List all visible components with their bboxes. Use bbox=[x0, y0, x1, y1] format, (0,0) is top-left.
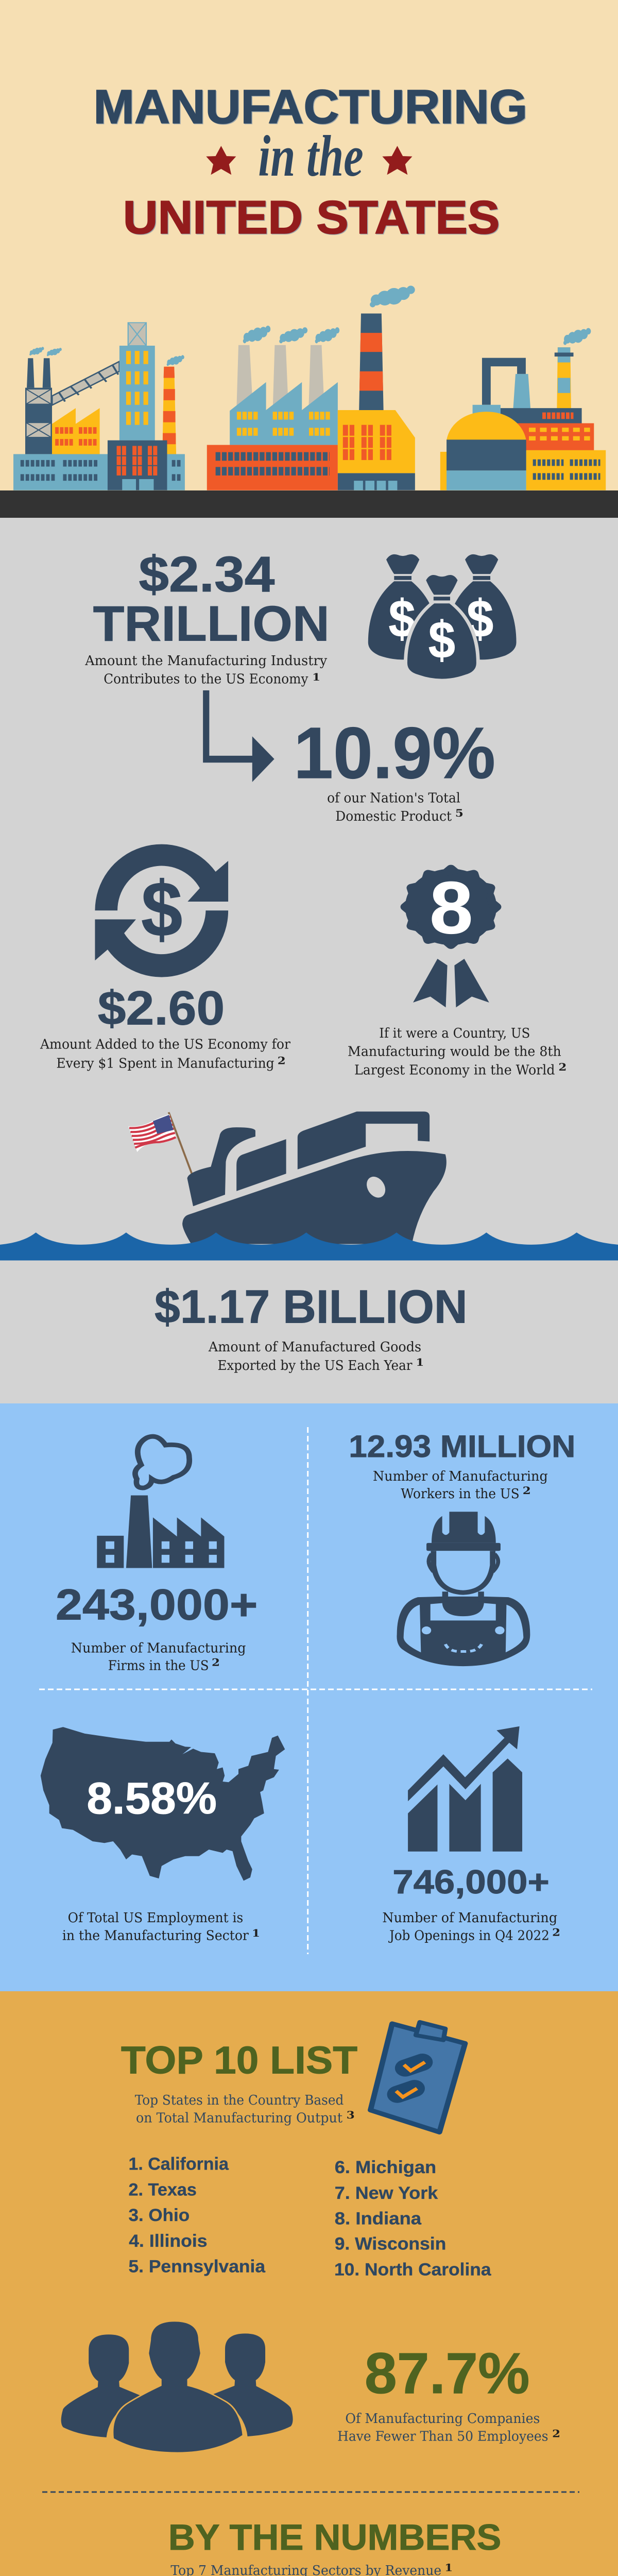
icon: circular dollar arrows bbox=[95, 844, 228, 977]
stat: 12.93 million workers: 12.93 MILLION bbox=[349, 1429, 575, 1464]
title line: United States: UNITED STATES bbox=[123, 191, 500, 244]
stat: $2.34 trillion: $2.34 bbox=[139, 546, 274, 602]
panel: top 10 and sectors bbox=[0, 1991, 618, 2576]
panel: economy bbox=[0, 518, 618, 1403]
stat: $1.17 billion: Exported by the US Each Year bbox=[217, 1357, 413, 1373]
factory: centre bbox=[207, 313, 415, 490]
icon: money bags bbox=[368, 554, 517, 680]
stat: $2.34 trillion: TRILLION bbox=[93, 596, 330, 651]
icon: flag bbox=[128, 1112, 192, 1174]
caption: top states: on Total Manufacturing Output bbox=[136, 2110, 342, 2126]
list: states 1 to 5: 2. Texas bbox=[128, 2180, 197, 2200]
icon: rank ribbon: 8 bbox=[430, 867, 473, 949]
heading: top 10 list: TOP 10 LIST bbox=[121, 2038, 357, 2082]
list: states 6 to 10: 6. Michigan bbox=[335, 2158, 436, 2177]
stat: $2.34 trillion: Amount the Manufacturing Industry bbox=[84, 652, 328, 668]
stat: 10.9%: of our Nation's Total bbox=[327, 790, 460, 806]
smoke clouds bbox=[29, 286, 591, 366]
icon: worker bbox=[397, 1512, 530, 1666]
waves bbox=[0, 1232, 618, 1260]
list: states 6 to 10: 9. Wisconsin bbox=[335, 2234, 446, 2254]
caption: 8th largest economy: 2 bbox=[558, 1061, 566, 1073]
stat: 243,000+ firms: Number of Manufacturing bbox=[71, 1640, 246, 1656]
stat: $1.17 billion: $1.17 BILLION bbox=[154, 1281, 468, 1333]
heading: by the numbers bbox=[168, 2518, 501, 2576]
factory: right bbox=[440, 347, 606, 490]
panel: workforce bbox=[0, 1403, 618, 1991]
stat: 746,000+ openings: 2 bbox=[552, 1927, 560, 1938]
caption: top states: Top States in the Country Based bbox=[135, 2092, 344, 2108]
list: states 6 to 10 bbox=[334, 2158, 491, 2280]
icon: rising bar chart bbox=[408, 1726, 522, 1852]
arrow: to 10.9% bbox=[203, 690, 274, 782]
caption: 8th largest economy: Largest Economy in the World bbox=[354, 1062, 555, 1078]
icon: money bags: $ bbox=[467, 589, 493, 648]
title line: in the: in the bbox=[258, 124, 364, 189]
list: states 1 to 5: 5. Pennsylvania bbox=[128, 2257, 266, 2277]
stat: $2.34 trillion: Contributes to the US Economy bbox=[104, 671, 308, 687]
caption: 8th largest economy: If it were a Country, US bbox=[379, 1025, 530, 1041]
list: states 1 to 5: 4. Illinois bbox=[129, 2231, 208, 2251]
stat: 8.58% on US map: 1 bbox=[252, 1927, 260, 1939]
icon: right star bbox=[382, 146, 413, 175]
illustration: cargo ship bbox=[0, 1112, 618, 1260]
caption: top states: 3 bbox=[347, 2109, 355, 2121]
ship hull and decks bbox=[182, 1112, 447, 1244]
stat: 746,000+ openings: Number of Manufacturing bbox=[382, 1909, 557, 1925]
stat: 8.58% on US map: in the Manufacturing Sector bbox=[62, 1927, 249, 1943]
stat: 243,000+ firms: Firms in the US bbox=[108, 1657, 209, 1673]
stat: 87.7%: Of Manufacturing Companies bbox=[345, 2410, 540, 2426]
icon: clipboard bbox=[370, 2022, 465, 2132]
title bbox=[93, 80, 527, 244]
stat: 8.58% on US map: Of Total US Employment is bbox=[68, 1909, 243, 1925]
stat: 87.7%: 2 bbox=[552, 2428, 560, 2439]
stat: 10.9%: Domestic Product bbox=[335, 808, 452, 824]
heading: by the numbers: BY THE NUMBERS bbox=[168, 2518, 501, 2557]
stat: $2.60: Every $1 Spent in Manufacturing bbox=[56, 1055, 274, 1071]
title line: Manufacturing: MANUFACTURING bbox=[93, 80, 527, 133]
list: states 1 to 5 bbox=[128, 2155, 266, 2277]
icon: US map bbox=[41, 1727, 285, 1881]
caption: 8th largest economy bbox=[348, 1025, 566, 1078]
stat: 243,000+ firms: 243,000+ bbox=[56, 1580, 258, 1629]
caption: top states bbox=[135, 2092, 355, 2126]
stat: 87.7% bbox=[337, 2341, 560, 2444]
stat: 746,000+ openings bbox=[382, 1863, 560, 1943]
stat: 746,000+ openings: 746,000+ bbox=[392, 1863, 550, 1901]
caption: 8th largest economy: Manufacturing would be the 8th bbox=[348, 1043, 561, 1059]
stat: 12.93 million workers bbox=[349, 1429, 575, 1502]
stat: $2.34 trillion bbox=[84, 546, 330, 687]
stat: 8.58% on US map: 8.58% bbox=[87, 1774, 217, 1823]
stat: 87.7%: 87.7% bbox=[365, 2341, 530, 2405]
stat: 10.9%: 10.9% bbox=[294, 713, 495, 794]
stat: $1.17 billion bbox=[154, 1281, 468, 1373]
list: states 6 to 10: 10. North Carolina bbox=[334, 2260, 491, 2280]
stat: $1.17 billion: 1 bbox=[416, 1357, 424, 1368]
stat: 10.9%: 5 bbox=[455, 807, 464, 819]
stat: 243,000+ firms bbox=[56, 1580, 258, 1673]
stat: 243,000+ firms: 2 bbox=[212, 1656, 220, 1668]
stat: $2.60: Amount Added to the US Economy for bbox=[40, 1036, 290, 1052]
stat: $2.60: $2.60 bbox=[98, 981, 225, 1035]
heading: by the numbers: 1 bbox=[444, 2562, 453, 2573]
ground band bbox=[0, 490, 618, 518]
stat: $2.34 trillion: 1 bbox=[312, 671, 320, 683]
icon: people bbox=[61, 2321, 293, 2453]
panel: header bbox=[0, 0, 618, 490]
stat: $2.60 bbox=[40, 981, 290, 1071]
list: states 6 to 10: 8. Indiana bbox=[335, 2209, 422, 2229]
stat: $2.60: 2 bbox=[278, 1055, 286, 1066]
stat: 12.93 million workers: Number of Manufacturing bbox=[373, 1468, 548, 1484]
stat: 12.93 million workers: 2 bbox=[523, 1485, 531, 1496]
stat: 10.9% bbox=[294, 713, 495, 824]
stat: $1.17 billion: Amount of Manufactured Goods bbox=[208, 1339, 421, 1354]
illustration: factories bbox=[13, 286, 606, 490]
icon: money bags: $ bbox=[428, 611, 455, 669]
list: states 6 to 10: 7. New York bbox=[335, 2183, 438, 2203]
icon: factory with smoke bbox=[97, 1436, 224, 1568]
icon: money bags: $ bbox=[389, 589, 416, 648]
stat: 12.93 million workers: Workers in the US bbox=[401, 1486, 520, 1502]
stat: 746,000+ openings: Job Openings in Q4 2022 bbox=[388, 1927, 550, 1943]
list: states 1 to 5: 1. California bbox=[128, 2155, 229, 2174]
factory: left bbox=[13, 323, 185, 490]
icon: circular dollar arrows: $ bbox=[141, 865, 182, 953]
list: states 1 to 5: 3. Ohio bbox=[128, 2206, 190, 2225]
stat: 8.58% on US map bbox=[41, 1727, 285, 1943]
icon: rank ribbon bbox=[399, 863, 503, 1007]
stat: 87.7%: Have Fewer Than 50 Employees bbox=[337, 2428, 548, 2444]
icon: left star bbox=[206, 146, 236, 175]
